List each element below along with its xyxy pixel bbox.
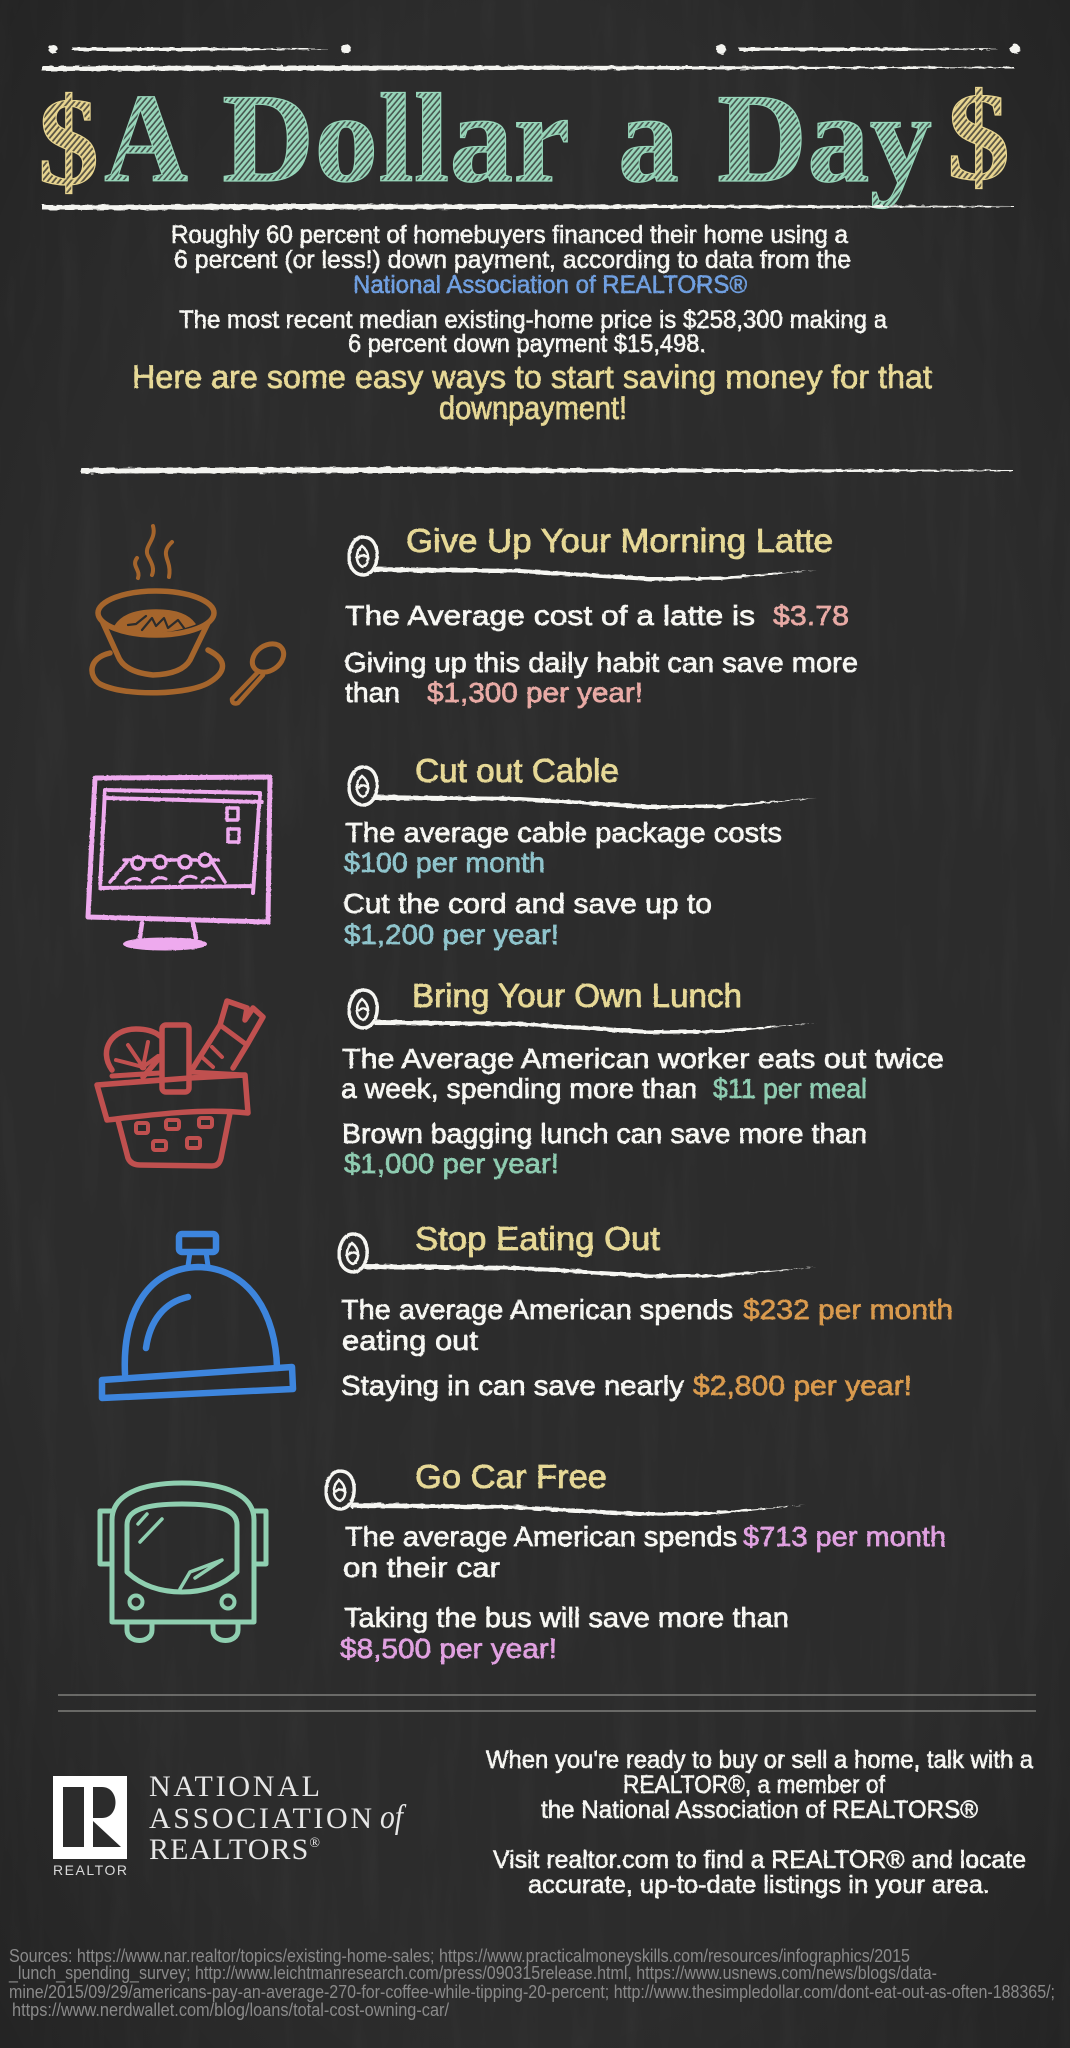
logo wordmark: ASSOCIATION [149, 1802, 372, 1835]
eating out copy: The average American spends [341, 1294, 733, 1325]
icon: bus [100, 1483, 266, 1640]
call to action [132, 359, 932, 426]
closing message [486, 1746, 1033, 1899]
intro text: 6 percent (or less!) down payment, according to data from the [174, 246, 851, 274]
car free copy: $8,500 per year! [340, 1633, 557, 1664]
sources: Sources: https://www.nar.realtor/topics/existing-home-sales; https://www.practicalmoneyskills.com/resources/infographics/2015 [9, 1945, 910, 1966]
closing message: REALTOR®, a member of [623, 1771, 885, 1799]
cable copy [343, 817, 782, 950]
logo wordmark: REALTORS [149, 1833, 308, 1866]
heading: car free: Go Car Free [415, 1458, 607, 1495]
logo wordmark: ® [309, 1836, 320, 1851]
title words: a [618, 69, 679, 209]
eating out copy [341, 1294, 953, 1401]
intro text: 6 percent down payment $15,498. [348, 330, 706, 358]
eating out copy: $232 per month [743, 1294, 953, 1325]
call to action: downpayment! [439, 390, 627, 426]
logo wordmark: of [380, 1799, 407, 1836]
title [38, 68, 1010, 212]
logo caption: REALTOR [53, 1862, 127, 1878]
latte copy: Giving up this daily habit can save more [344, 647, 858, 678]
lunch copy: Brown bagging lunch can save more than [342, 1118, 867, 1149]
heading: cable [349, 752, 817, 809]
panel: cable [88, 752, 817, 950]
footer divider rules [58, 1695, 1036, 1711]
latte copy: The Average cost of a latte is [345, 600, 755, 631]
title upper chalk rule [42, 66, 1014, 71]
panel: latte [92, 522, 858, 708]
lunch copy: The Average American worker eats out twice [342, 1043, 944, 1074]
title right dollar sign: $ [947, 68, 1010, 207]
intro text: The most recent median existing-home price is $258,300 making a [179, 306, 887, 334]
eating out copy: Staying in can save nearly [341, 1370, 684, 1401]
icon: realtor R block [53, 1776, 127, 1859]
title words [104, 69, 932, 209]
cable copy: Cut the cord and save up to [343, 888, 712, 919]
intro text: Roughly 60 percent of homebuyers financed their home using a [171, 221, 848, 249]
icon: monitor [88, 777, 270, 950]
latte copy: $1,300 per year! [427, 677, 643, 708]
panel: eating out [102, 1220, 953, 1401]
closing message: the National Association of REALTORS® [541, 1796, 979, 1824]
heading: cable: Cut out Cable [415, 752, 619, 789]
lunch copy: $1,000 per year! [344, 1148, 559, 1179]
title words: A [104, 69, 188, 209]
cable copy: The average cable package costs [345, 817, 782, 848]
title left dollar sign: $ [38, 73, 99, 212]
latte copy: than [345, 677, 400, 708]
eating out copy: eating out [342, 1325, 478, 1356]
icon: basket [97, 1001, 263, 1166]
title lower chalk rule [42, 204, 1014, 210]
sources: https://www.nerdwallet.com/blog/loans/total-cost-owning-car/ [12, 1999, 450, 2020]
lunch copy: $11 per meal [713, 1073, 867, 1104]
icon: cloche [102, 1234, 293, 1398]
title words: Day [717, 69, 932, 209]
heading: lunch: Bring Your Own Lunch [412, 977, 742, 1014]
logo wordmark [149, 1770, 407, 1866]
top dotted chalk rules [48, 44, 1020, 54]
heading: latte: Give Up Your Morning Latte [406, 522, 833, 559]
lunch copy [341, 1043, 944, 1179]
panel: car free [100, 1458, 946, 1664]
cable copy: $1,200 per year! [344, 919, 559, 950]
eating out copy: $2,800 per year! [693, 1370, 912, 1401]
latte copy: $3.78 [773, 600, 849, 631]
closing message: accurate, up-to-date listings in your area. [528, 1871, 990, 1899]
heading: eating out: Stop Eating Out [415, 1220, 660, 1257]
icon: coffee cup [92, 526, 289, 704]
car free copy: $713 per month [743, 1521, 946, 1552]
panel: lunch [97, 977, 944, 1179]
car free copy: Taking the bus will save more than [344, 1602, 789, 1633]
closing message: Visit realtor.com to find a REALTOR® and locate [493, 1846, 1026, 1874]
heading: eating out [339, 1220, 817, 1278]
car free copy: The average American spends [345, 1521, 737, 1552]
car free copy [340, 1521, 946, 1664]
section chalk rule [81, 467, 1013, 474]
sources [8, 1945, 1055, 2020]
intro text [171, 221, 887, 358]
heading: lunch [349, 977, 817, 1034]
latte copy [344, 600, 858, 708]
cable copy: $100 per month [344, 847, 545, 878]
logo wordmark: NATIONAL [149, 1770, 320, 1803]
closing message: When you're ready to buy or sell a home, talk with a [486, 1746, 1033, 1774]
call to action: Here are some easy ways to start saving money for that [132, 359, 932, 395]
logo: National Association of REALTORS [53, 1770, 407, 1878]
heading: latte [349, 522, 833, 581]
lunch copy: a week, spending more than [341, 1073, 697, 1104]
title words: Dollar [222, 69, 570, 209]
car free copy: on their car [343, 1552, 500, 1583]
sources: _lunch_spending_survey; http://www.leichtmanresearch.com/press/090315release.html, https://www.usnews.com/news/blogs/data- [8, 1962, 937, 1984]
intro text: National Association of REALTORS® [353, 271, 748, 299]
heading: car free [326, 1458, 806, 1516]
